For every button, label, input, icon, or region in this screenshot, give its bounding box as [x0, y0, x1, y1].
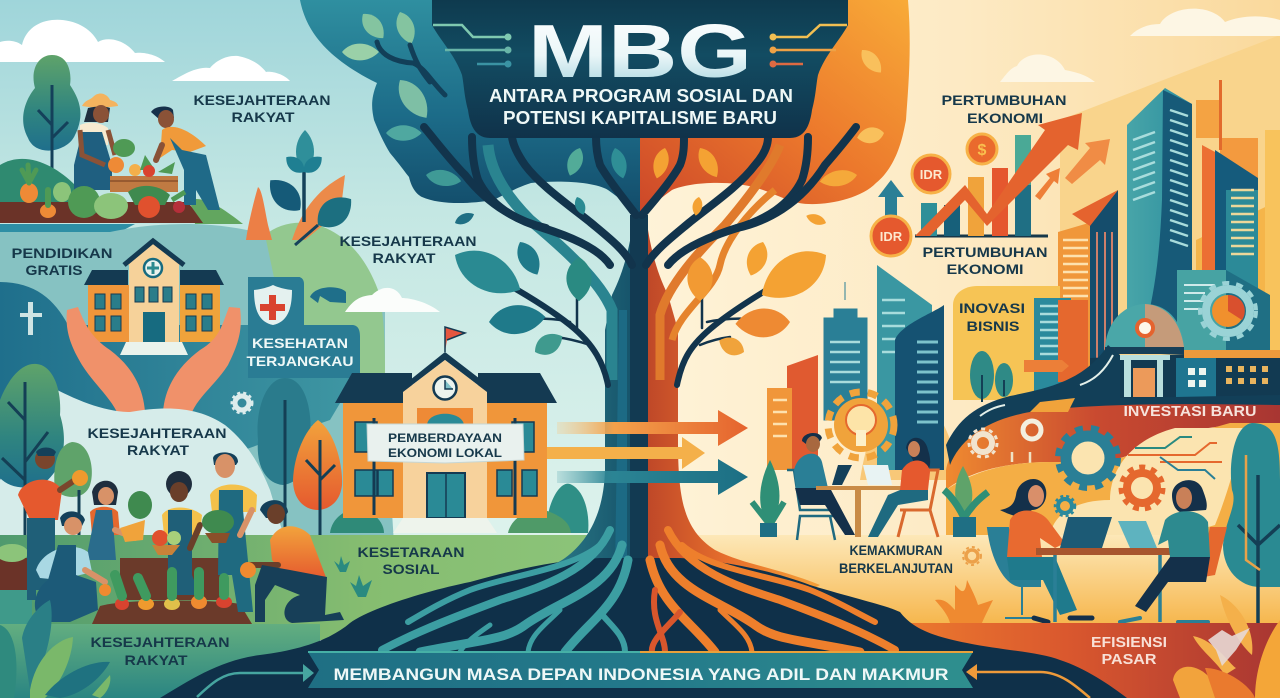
- label: pertumbuhan ekonomi top: EKONOMI: [967, 110, 1043, 126]
- cloud mid top: [172, 56, 290, 81]
- arrow head left: [303, 664, 314, 682]
- woman right chair: [1175, 527, 1227, 582]
- arrows: small growth arrows: [1035, 139, 1110, 200]
- right tower: [1202, 145, 1215, 275]
- label: kesejahteraan top: KESEJAHTERAAN: [194, 92, 330, 108]
- panel: social welfare left side: [0, 20, 610, 698]
- label: kemakmuran berkelanjutan: BERKELANJUTAN: [839, 560, 953, 576]
- label: pendidikan gratis: PENDIDIKAN: [12, 245, 112, 261]
- arrow line right: [975, 672, 1090, 698]
- orange trunk: [640, 215, 820, 640]
- icon: coin IDR lower with arrow: IDR: [880, 229, 903, 244]
- orange blob: [946, 423, 1280, 540]
- icon: coin IDR upper: IDR: [920, 167, 943, 182]
- banner text: MEMBANGUN MASA DEPAN INDONESIA YANG ADIL DAN MAKMUR: [334, 665, 948, 684]
- hand right: [163, 307, 241, 412]
- back left tree: [54, 442, 92, 497]
- icon: circuit lines: [1128, 437, 1222, 479]
- farmer woman: [86, 481, 152, 560]
- teal strip left: [0, 590, 32, 625]
- orange low tower: [1058, 300, 1088, 382]
- panel: community cloud with trees: [0, 364, 342, 540]
- icon: corner leaves: [0, 600, 110, 698]
- label: kesetaraan sosial: [358, 544, 464, 577]
- icon: capsule: [310, 287, 346, 303]
- icon: small teal gear: [1055, 496, 1075, 516]
- icon: shield: [254, 285, 292, 325]
- potted plant right: [944, 466, 988, 537]
- farmer woman centre: [152, 471, 202, 595]
- label: kesejahteraan plant: KESEJAHTERAAN: [340, 233, 476, 249]
- lower ground: [0, 624, 320, 698]
- circuit nodes left: [504, 34, 512, 68]
- label: efisiensi pasar: [1091, 634, 1167, 668]
- farm: vegetable crate: [108, 139, 178, 192]
- illustration: city panel with inovasi: [953, 286, 1088, 402]
- navy branches left: [424, 127, 636, 265]
- background: social side: [0, 0, 640, 698]
- teal back tower: [877, 265, 932, 470]
- teal right tree: [258, 378, 311, 485]
- farmer orange shirt: [18, 448, 88, 600]
- title: MBG: [528, 9, 752, 93]
- green field: [0, 535, 610, 640]
- label: kesejahteraan middle: RAKYAT: [127, 442, 189, 458]
- teal trunk: [470, 215, 640, 640]
- lower branches right: [677, 268, 803, 385]
- sign: [1024, 360, 1069, 372]
- label: pertumbuhan ekonomi bottom: PERTUMBUHAN: [922, 244, 1048, 260]
- icon: coin IDR upper: [912, 155, 950, 193]
- top cloud: [1000, 54, 1095, 82]
- woman left chair: [988, 528, 1040, 618]
- label: kesejahteraan top: [194, 92, 330, 125]
- arrow orange: [557, 410, 748, 446]
- label: kesejahteraan bottom: [90, 634, 230, 668]
- small teal tower: [1034, 298, 1071, 392]
- orange top right glow: [1060, 35, 1280, 400]
- dark teal hill: [0, 277, 360, 500]
- label: kemakmuran berkelanjutan: KEMAKMURAN: [850, 542, 942, 558]
- windows: [355, 422, 537, 496]
- branches on canopy top: [377, 42, 445, 95]
- illustration: dome and base: [1090, 304, 1280, 400]
- icon: small orange gear: [963, 547, 981, 565]
- label: kesehatan terjangkau: [246, 335, 354, 369]
- arrow head right: [966, 664, 977, 680]
- cloud left top: [0, 20, 165, 62]
- circuit lines left: [433, 25, 508, 64]
- orange mid tower: [1058, 222, 1092, 375]
- label: kesehatan terjangkau: TERJANGKAU: [246, 353, 354, 369]
- farm: vegetables: [20, 165, 185, 219]
- teal strand: [488, 145, 612, 380]
- school centre: [129, 262, 179, 342]
- hand left: [67, 307, 145, 412]
- label: kesejahteraan bottom: KESEJAHTERAAN: [90, 634, 230, 650]
- canopy right: [640, 0, 910, 213]
- school wings: [88, 285, 130, 342]
- label: kesejahteraan middle: [88, 425, 226, 458]
- orange tower back: [1220, 138, 1258, 250]
- school door: [143, 312, 165, 342]
- field soil: [92, 600, 252, 624]
- floor: [672, 535, 1280, 625]
- school windows: [95, 287, 212, 331]
- icon: decorative cross: [20, 302, 42, 335]
- navy branches right: [642, 127, 856, 265]
- bottom banner: [303, 652, 977, 688]
- woman with laptop right: [1120, 480, 1210, 622]
- label: pertumbuhan ekonomi bottom: [922, 244, 1048, 277]
- orange band: [946, 396, 1280, 490]
- icon: gear teal: [1058, 428, 1118, 488]
- mound with roots: [160, 530, 1127, 698]
- subtitle: [489, 86, 793, 128]
- panel: bottom right red band: [900, 623, 1280, 698]
- farmer kneeling right: [240, 500, 344, 623]
- illustration: tall skyscrapers: [1058, 80, 1280, 375]
- orange tower: [767, 388, 792, 470]
- icon: grass tufts: [334, 556, 372, 597]
- branch leaves right: [687, 196, 836, 360]
- roots left: [382, 530, 628, 652]
- flag: [445, 327, 465, 352]
- illustration: laptops and desk: [1036, 517, 1183, 622]
- orange right tree: [293, 420, 342, 510]
- clock: [434, 376, 456, 400]
- potted plant left: [752, 460, 784, 537]
- label: kesejahteraan plant: RAKYAT: [372, 250, 436, 266]
- label: pendidikan gratis: GRATIS: [26, 262, 82, 278]
- label: inovasi bisnis: [959, 300, 1025, 334]
- icon: hand with plant: [246, 130, 359, 245]
- tree: canopy and trunk: [300, 0, 910, 640]
- man chair: [787, 470, 835, 540]
- left tree: [0, 364, 64, 488]
- arrow teal: [557, 459, 748, 495]
- header panel: [432, 0, 848, 138]
- icon: school held in hands: [67, 241, 241, 412]
- label: kesejahteraan middle: KESEJAHTERAAN: [88, 425, 226, 441]
- subtitle: POTENSI KAPITALISME BARU: [503, 108, 777, 128]
- dark laptop: [832, 465, 852, 485]
- label: kesetaraan sosial: KESETARAAN: [358, 544, 464, 560]
- branch leaves left: [447, 195, 592, 360]
- panel: road hill with investment band: [946, 345, 1280, 490]
- dark trunk core: [630, 215, 648, 580]
- canopy leaf left: [342, 9, 630, 189]
- cloud by health panel: [345, 288, 440, 312]
- white laptop: [863, 465, 892, 485]
- illustration: local school: [330, 327, 588, 533]
- label: kesetaraan sosial: SOSIAL: [382, 561, 440, 577]
- label: efisiensi pasar: PASAR: [1102, 651, 1157, 668]
- farmer tall man: [202, 452, 257, 612]
- farm: soil: [0, 202, 203, 223]
- illustration: meeting table: [752, 392, 988, 540]
- red tower: [787, 355, 818, 470]
- table: [816, 486, 909, 537]
- icon: corner leaves: [1173, 595, 1280, 698]
- label: pertumbuhan ekonomi top: PERTUMBUHAN: [942, 92, 1066, 108]
- arrow peach: [547, 437, 705, 469]
- farm: green mound: [0, 159, 85, 203]
- school body: [343, 403, 547, 518]
- navy mound: [160, 558, 1127, 698]
- label: pendidikan gratis: [12, 245, 112, 278]
- background: economy side: [640, 0, 1280, 698]
- label: pertumbuhan ekonomi top: [942, 92, 1066, 126]
- farm: top left tree: [23, 55, 80, 172]
- illustration: city centre towers: [767, 265, 960, 480]
- label: kesejahteraan bottom: RAKYAT: [124, 652, 188, 668]
- label: inovasi bisnis: BISNIS: [966, 318, 1020, 334]
- subtitle: ANTARA PROGRAM SOSIAL DAN: [489, 86, 793, 106]
- teal core stripe: [615, 310, 627, 570]
- icon: orange grass: [935, 580, 993, 623]
- lower branches left: [478, 268, 608, 385]
- light green hill: [265, 223, 385, 400]
- label: investasi baru: INVESTASI BARU: [1124, 403, 1256, 420]
- farm: hill under man: [190, 199, 243, 224]
- school roof: [84, 270, 224, 285]
- water strip: [0, 224, 135, 238]
- panel: health badge: [248, 277, 360, 378]
- road: [946, 345, 1280, 465]
- label: inovasi bisnis: INOVASI: [959, 300, 1025, 316]
- arrow line left: [197, 673, 306, 697]
- woman chair: [898, 470, 938, 537]
- label: kesehatan terjangkau: KESEHATAN: [252, 335, 348, 351]
- navy tower: [895, 305, 944, 470]
- banner ribbon: [308, 652, 973, 688]
- teal front tower: [824, 282, 867, 420]
- farmer man: [151, 106, 220, 210]
- school roofs: [335, 373, 557, 403]
- illustration: gear building: [1177, 270, 1270, 350]
- vegetable rows: [115, 572, 232, 610]
- banner text: EKONOMI LOKAL: [388, 448, 502, 460]
- label: kemakmuran berkelanjutan: [839, 542, 953, 576]
- banner: [367, 424, 524, 463]
- banner text: PEMBERDAYAAN: [388, 433, 502, 445]
- icon: gear: [232, 393, 252, 413]
- main tower: [1127, 88, 1192, 345]
- field soil left: [0, 558, 27, 590]
- icon: small gears on road: [969, 421, 1041, 467]
- label: efisiensi pasar: EFISIENSI: [1091, 634, 1167, 651]
- panel: economy right side: [672, 9, 1280, 698]
- hedges: [547, 484, 588, 533]
- label: kesejahteraan plant: [340, 233, 476, 266]
- field lettuce left: [0, 544, 28, 562]
- door: [427, 473, 465, 518]
- yellow side: [1265, 130, 1280, 370]
- back soil: [120, 558, 222, 600]
- panel: lower workspace: [672, 423, 1280, 625]
- farmer woman with hat: [74, 94, 118, 190]
- tree right: [1223, 423, 1280, 587]
- woman: [868, 438, 930, 537]
- trees: [970, 351, 994, 399]
- label: pertumbuhan ekonomi bottom: EKONOMI: [946, 261, 1024, 277]
- mid teal band: [0, 224, 395, 560]
- orange strand: [660, 145, 780, 380]
- orange patch: [1030, 398, 1075, 412]
- icon: sparkle: [1208, 628, 1250, 666]
- cream cloud: [1050, 428, 1243, 540]
- banner text: [388, 433, 502, 460]
- label: kesejahteraan top: RAKYAT: [232, 109, 295, 125]
- icon: coin IDR lower with arrow: [871, 180, 911, 256]
- farmer sitting left: [35, 511, 111, 622]
- illustration: farmers group: [18, 448, 344, 623]
- icon: gear orange: [1121, 467, 1163, 509]
- yellow panel: [953, 286, 1060, 400]
- icon: coin dollar: [967, 134, 997, 164]
- roots right: [650, 530, 895, 652]
- canopy left: [300, 0, 640, 213]
- chart: growth bars with arrow: [915, 113, 1082, 236]
- orange bush behind: [860, 393, 960, 480]
- circuit nodes right: [770, 34, 776, 68]
- circuit lines right: [773, 25, 847, 64]
- icon: coin dollar: $: [978, 142, 987, 159]
- arrows: program flow: [547, 410, 748, 495]
- canopy leaf right: [650, 45, 886, 189]
- man: [794, 433, 855, 535]
- lightbulb gear: [828, 392, 894, 458]
- woman with laptop left: [1000, 479, 1092, 622]
